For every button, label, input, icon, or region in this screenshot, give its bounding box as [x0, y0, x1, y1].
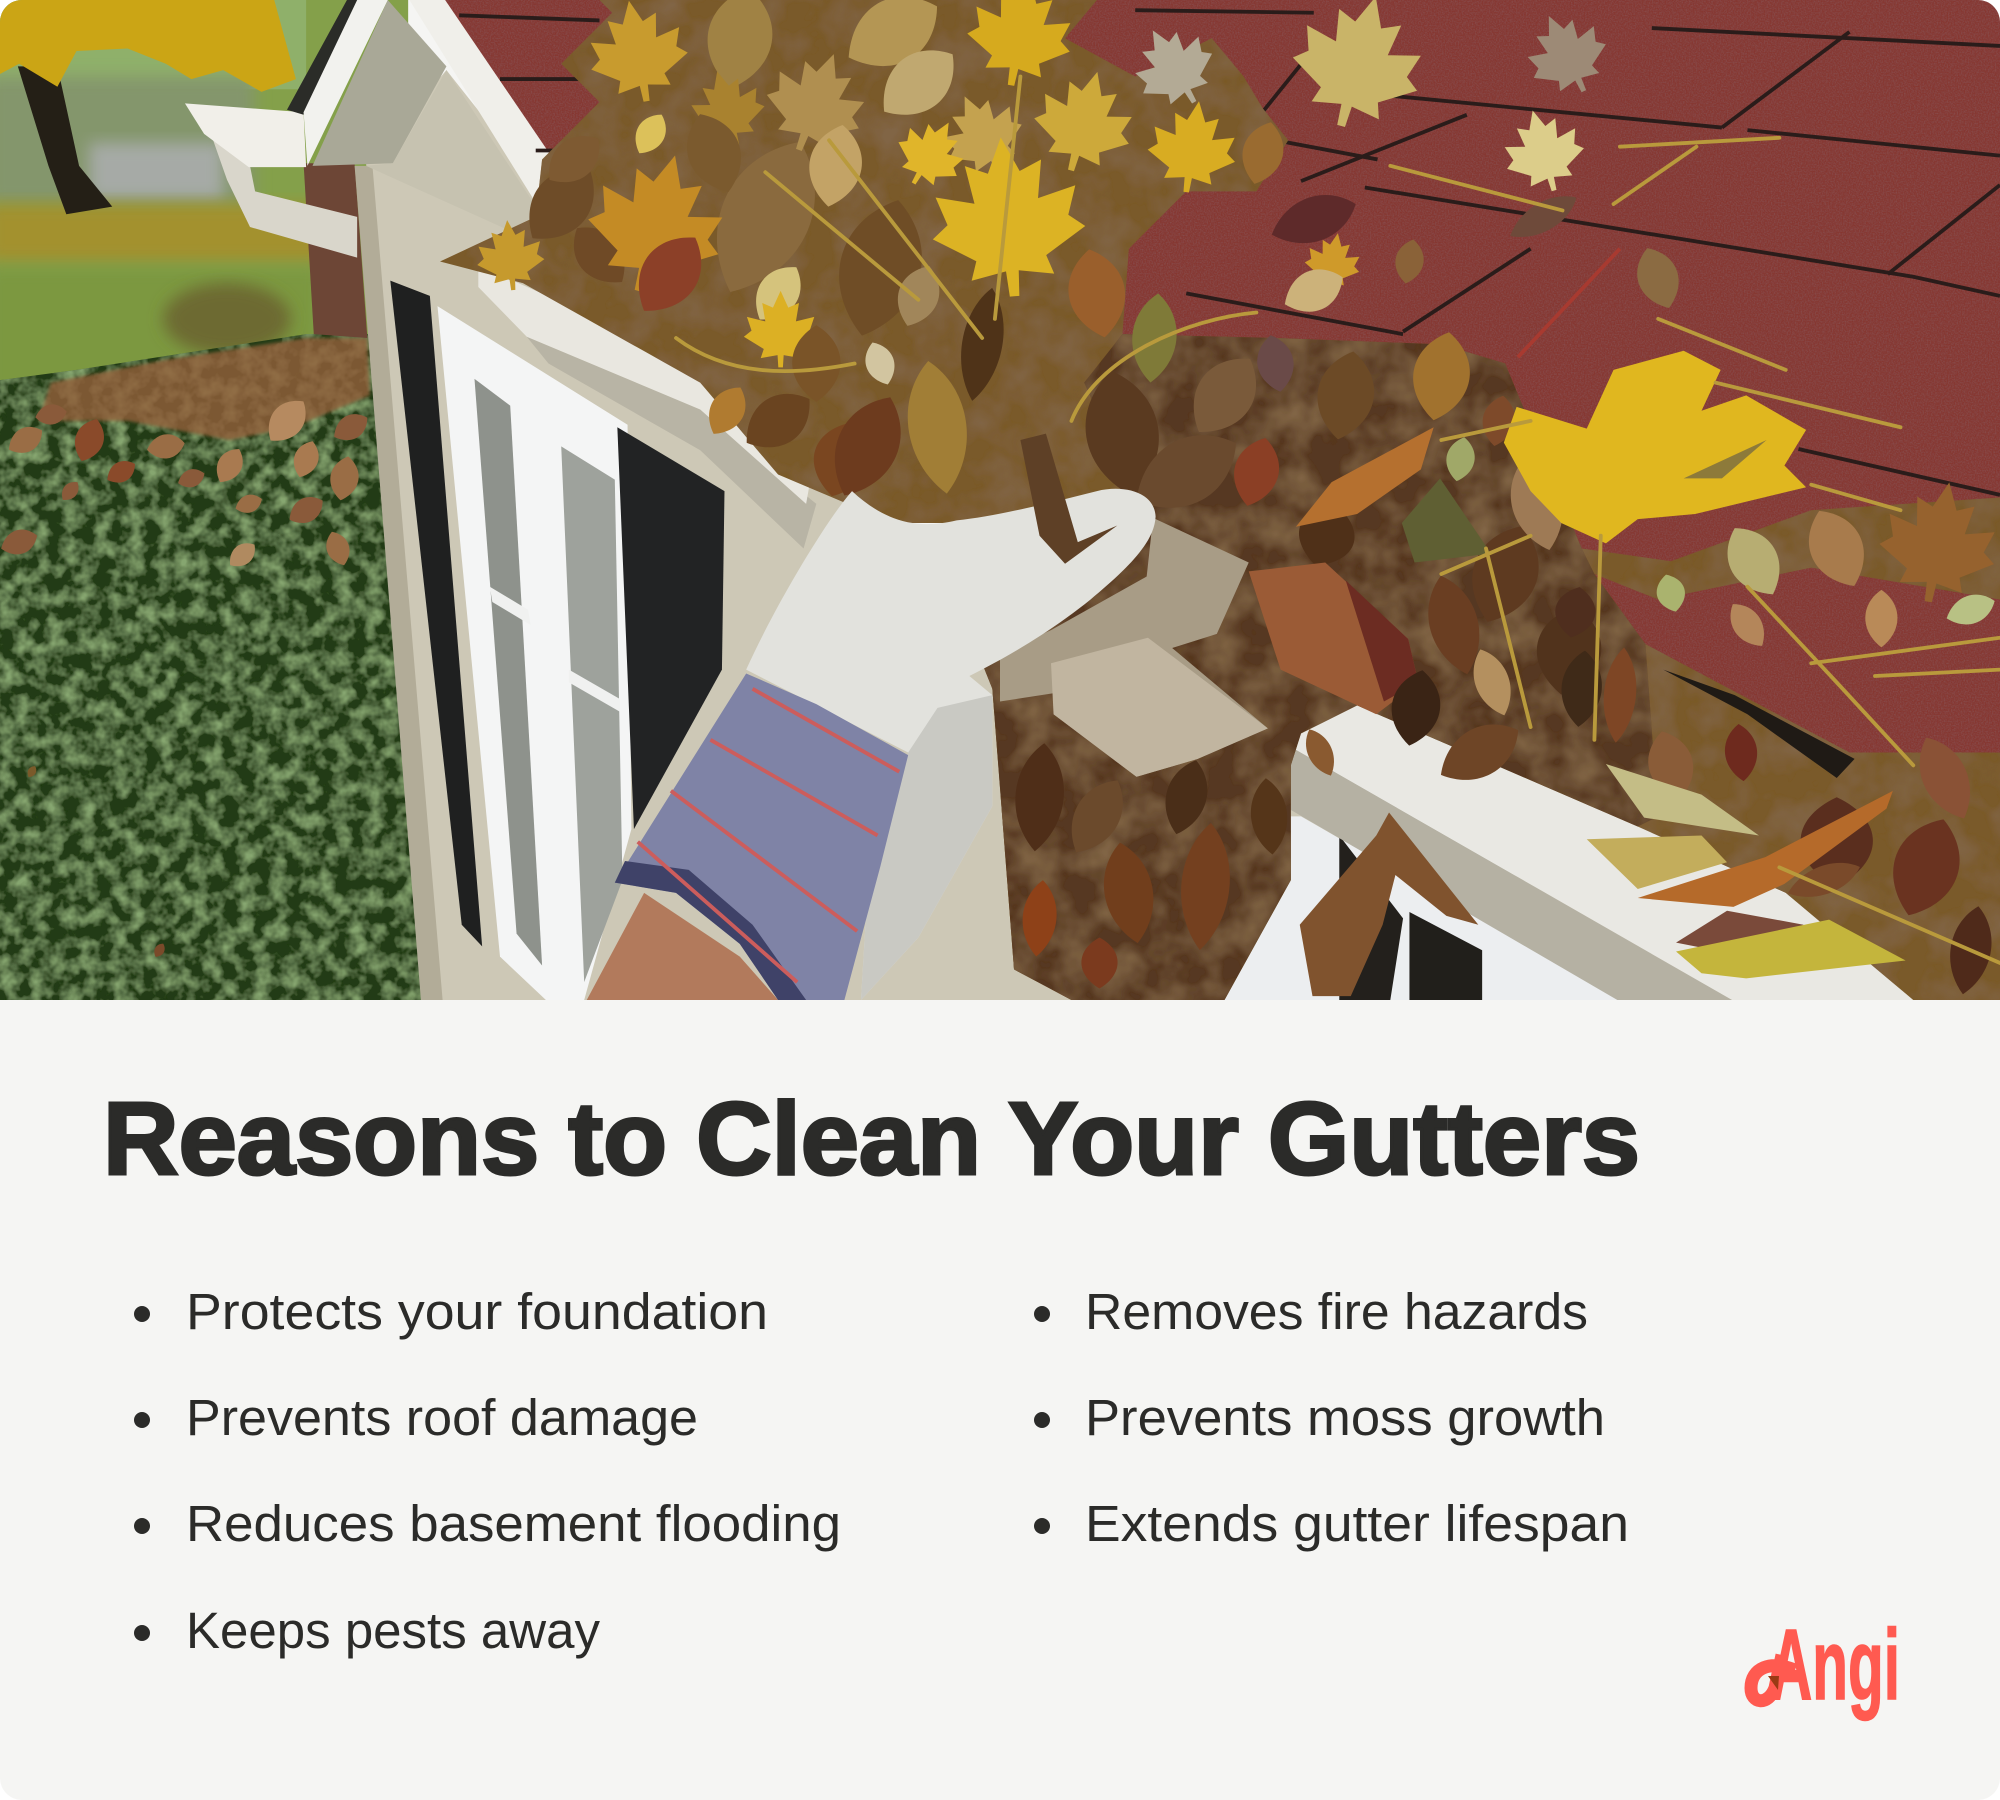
brown-red leaf	[1676, 911, 1804, 957]
reasons list: right column	[1034, 1283, 1629, 1552]
yellow tree	[0, 0, 296, 214]
left shutter	[390, 281, 482, 946]
upper leaves	[690, 123, 840, 311]
bush with fallen leaves	[0, 334, 427, 1000]
window below gutter	[1214, 816, 1620, 1000]
pale green leaf	[1606, 764, 1759, 835]
gable	[287, 0, 548, 198]
reason: roof damage: Prevents roof damage	[186, 1389, 698, 1446]
red shingle roof	[445, 0, 2000, 791]
corner trim	[355, 166, 443, 1000]
olive leaf	[1402, 478, 1491, 562]
gutter mouth	[1663, 670, 1855, 778]
reason: foundation: Protects your foundation	[186, 1283, 768, 1340]
pile shadow mass	[440, 0, 2000, 1000]
reason: gutter lifespan: Extends gutter lifespan	[1085, 1495, 1629, 1552]
orange stem leaf	[1638, 791, 1893, 907]
large hanging leaf	[1300, 812, 1478, 996]
reason: fire hazards: Removes fire hazards	[1085, 1283, 1588, 1340]
red-brown leaf	[1249, 562, 1418, 714]
twigs	[676, 77, 2000, 963]
glove and cuff	[587, 434, 1156, 1000]
house siding	[366, 70, 1786, 1000]
Angi logo	[1751, 1609, 1900, 1721]
reasons list: left column	[134, 1283, 841, 1659]
yellow leaf at the gutter	[1676, 920, 1906, 978]
maple leaf in front of the fingers	[1000, 518, 1268, 777]
window	[437, 306, 631, 1000]
right shutter	[617, 427, 724, 829]
hanging leaves	[1011, 741, 1068, 853]
lower mass leaves	[900, 357, 975, 498]
heading: Reasons to Clean Your Gutters	[103, 1081, 1640, 1196]
reason: pests: Keeps pests away	[186, 1602, 600, 1659]
orange leaf	[1296, 427, 1434, 527]
leaf pile	[440, 0, 2000, 1000]
photo: gloved hand clearing leaves from a gutter	[0, 0, 2000, 1000]
roof leaves	[1279, 0, 1438, 143]
big yellow maple leaf	[1504, 351, 1806, 543]
reason: moss growth: Prevents moss growth	[1085, 1389, 1605, 1446]
Angi logo: Angi	[1770, 1609, 1900, 1721]
lower gutter	[1274, 705, 1939, 1000]
background lawn and fence	[0, 0, 408, 408]
reason: basement flooding: Reduces basement flooding	[186, 1495, 841, 1552]
hanging gutter and downspout at the corner	[185, 103, 357, 258]
lower mass darker base	[982, 334, 1658, 1000]
upper gutter	[478, 265, 816, 504]
yellow-green leaf	[1587, 835, 1727, 889]
fascia under gutter	[527, 337, 816, 548]
brown wall and far trim	[304, 163, 367, 338]
